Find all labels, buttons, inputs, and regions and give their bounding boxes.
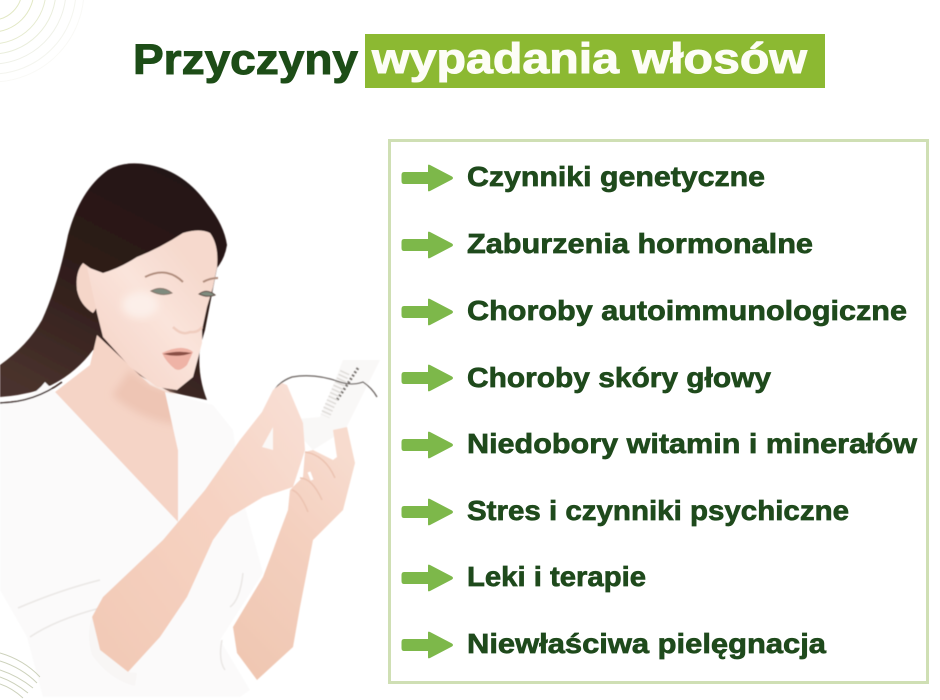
near sleeve cuff <box>89 617 137 686</box>
neck and chest <box>55 335 178 522</box>
title highlight bar <box>365 34 825 88</box>
ring <box>309 472 312 480</box>
hair strand <box>273 376 377 397</box>
nose <box>173 327 202 333</box>
hair <box>0 163 227 400</box>
shirt <box>0 382 263 697</box>
item: stress: Stres i czynniki psychiczne <box>467 495 849 526</box>
far hand and forearm <box>233 427 355 680</box>
cheek highlight <box>122 292 158 318</box>
panel border <box>390 140 928 682</box>
title: highlighted words: wypadania włosów <box>371 35 808 83</box>
left eye <box>151 288 172 295</box>
shirt fold lines <box>18 573 243 670</box>
ear <box>77 263 100 313</box>
right eye <box>199 291 215 296</box>
item: drugs and therapies: Leki i terapie <box>467 561 646 592</box>
decorative rings: top left <box>0 0 84 82</box>
panel: causes list <box>390 140 928 682</box>
item: hormonal disorders: Zaburzenia hormonalne <box>467 228 813 259</box>
finger gap <box>262 427 273 450</box>
decorative rings: bottom left <box>0 653 40 698</box>
neck shadow <box>112 370 178 425</box>
left brow <box>145 272 183 282</box>
item: deficiencies: Niedobory witamin i minerałów <box>467 428 917 459</box>
right brow <box>203 278 218 282</box>
comb <box>285 360 380 450</box>
near hand and forearm <box>92 383 305 672</box>
item: genetic factors: Czynniki genetyczne <box>467 161 765 192</box>
item: autoimmune diseases: Choroby autoimmunologiczne <box>467 295 907 326</box>
title: dark word: Przyczyny <box>133 36 358 84</box>
comb bristles <box>325 372 345 416</box>
mouth <box>162 348 193 370</box>
hair strand on shoulder <box>0 382 62 403</box>
illustration: woman inspecting hair on a comb <box>0 163 380 697</box>
item: improper care: Niewłaściwa pielęgnacja <box>467 628 826 659</box>
face <box>87 230 217 390</box>
far hand fingers <box>292 452 335 512</box>
title <box>133 34 825 88</box>
mouth opening <box>163 352 192 356</box>
comb teeth <box>337 368 358 400</box>
item: scalp diseases: Choroby skóry głowy <box>467 362 771 393</box>
